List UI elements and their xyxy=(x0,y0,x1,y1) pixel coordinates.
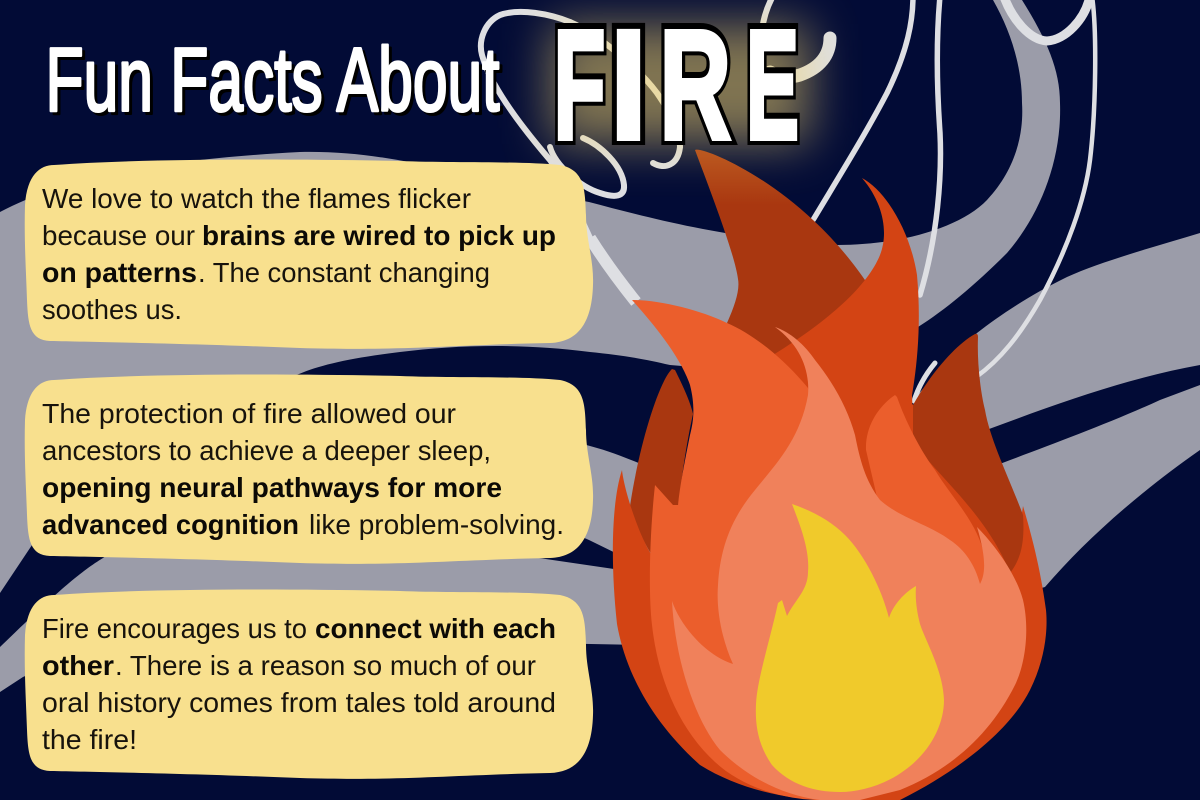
panel: fact two: opening neural pathways for more xyxy=(42,472,502,503)
panel: fact one: . The constant changing xyxy=(198,257,490,288)
panel: fact three: . There is a reason so much of our xyxy=(115,650,536,681)
heading: Fun Facts About: Fun Facts About xyxy=(46,30,500,130)
panel: fact two: advanced cognition xyxy=(42,509,299,540)
flame: dark back tongue xyxy=(695,150,867,400)
heading: FIRE xyxy=(554,0,799,176)
panel: fact one xyxy=(25,160,593,349)
flame: dark right tongue xyxy=(913,334,1023,573)
heading: FIRE: R xyxy=(660,0,731,172)
flame: orange body xyxy=(632,300,860,800)
glow behind FIRE xyxy=(550,24,810,144)
heading: FIRE: F xyxy=(554,0,606,170)
panel: fact three: Fire encourages us to xyxy=(42,613,307,644)
heading: FIRE: R xyxy=(660,0,731,170)
icon: flame xyxy=(613,150,1047,800)
panel: fact three: other xyxy=(42,650,114,681)
background: white curling lines xyxy=(481,0,1095,401)
panel: fact one: brains are wired to pick up xyxy=(202,220,556,251)
panel: fact three: the fire! xyxy=(42,724,137,755)
flame: salmon inner xyxy=(672,327,1026,800)
flame: red base xyxy=(613,395,1047,800)
panel: fact one: soothes us. xyxy=(42,294,182,325)
heading: FIRE: E xyxy=(746,0,799,172)
panel: fact three: connect with each xyxy=(315,613,556,644)
heading: FIRE: F xyxy=(554,0,606,172)
flame: orange right lobe xyxy=(866,395,985,586)
panel: fact three: oral history comes from tales told around xyxy=(42,687,556,718)
panel: fact one: on patterns xyxy=(42,257,197,288)
panel: fact one: because our xyxy=(42,220,195,251)
flame: red back tongue xyxy=(773,178,919,480)
panel: fact one: We love to watch the flames flicker xyxy=(42,183,471,214)
heading: Fun Facts About xyxy=(46,30,502,134)
panel: fact two: like problem-solving. xyxy=(309,509,564,540)
flame: dark left tongue xyxy=(630,369,693,560)
heading: Fun Facts About: Fun Facts About xyxy=(48,34,502,134)
flame: yellow core xyxy=(756,504,944,792)
panel: fact two: ancestors to achieve a deeper sleep, xyxy=(42,435,491,466)
panel: fact two: The protection of fire allowed our xyxy=(42,398,456,429)
panel: fact two xyxy=(25,375,593,564)
panel: fact three xyxy=(25,590,593,779)
heading: FIRE: E xyxy=(746,0,799,170)
